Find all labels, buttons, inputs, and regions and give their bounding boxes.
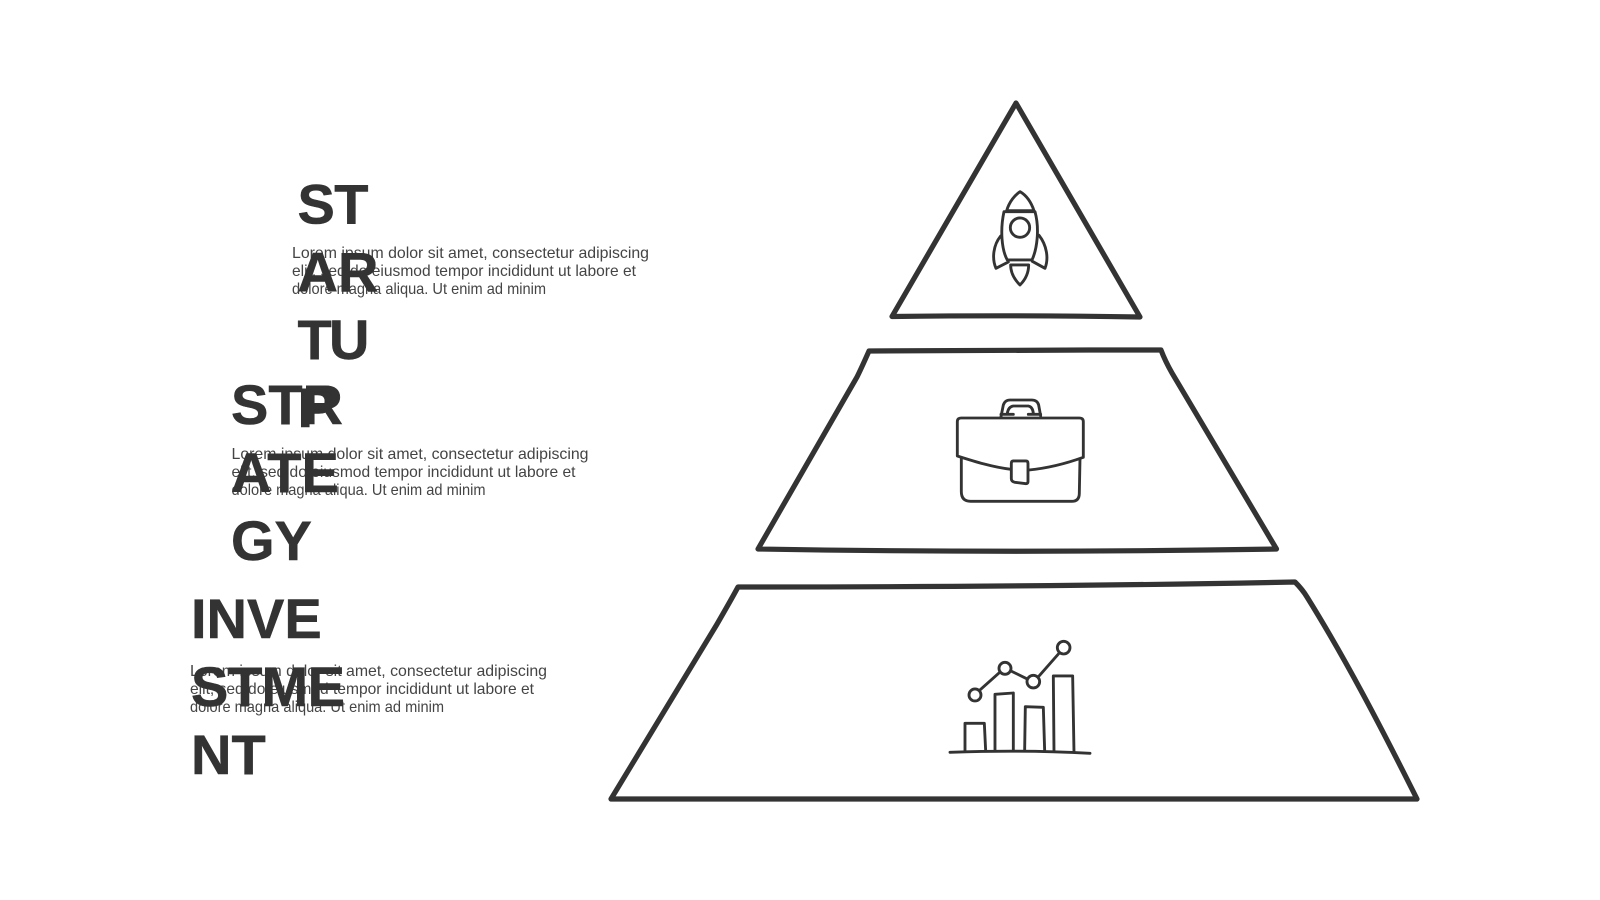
pyramid tier: top triangle bbox=[892, 103, 1140, 317]
text block: investment description: Lorem ipsum dolor sit amet, consectetur adipiscing bbox=[190, 663, 547, 680]
text block: investment description bbox=[190, 663, 547, 716]
text block: strategy description bbox=[232, 446, 588, 499]
icon: rocket bbox=[994, 192, 1047, 285]
pyramid tier: middle trapezoid bbox=[758, 350, 1276, 551]
heading: strategy: STR bbox=[231, 373, 343, 436]
heading: investment: NT bbox=[191, 723, 266, 786]
text block: startup description bbox=[292, 245, 649, 298]
heading: investment bbox=[191, 587, 345, 786]
heading: startup: TU bbox=[298, 308, 370, 371]
heading: startup: ST bbox=[298, 172, 368, 236]
text block: strategy description: Lorem ipsum dolor sit amet, consectetur adipiscing bbox=[232, 446, 588, 463]
icon: bar chart with trend line bbox=[950, 641, 1090, 753]
heading: investment: STME bbox=[191, 655, 345, 718]
text block: investment description: dolore magna aliqua. Ut enim ad minim bbox=[190, 699, 444, 716]
text block: startup description: dolore magna aliqua. Ut enim ad minim bbox=[292, 281, 546, 298]
heading: startup: P bbox=[298, 376, 335, 439]
heading: strategy: ATE bbox=[231, 441, 339, 504]
heading: strategy bbox=[231, 373, 343, 572]
icon: briefcase bbox=[957, 400, 1083, 501]
heading: investment: INVE bbox=[191, 587, 322, 650]
pyramid tier: bottom trapezoid bbox=[611, 582, 1417, 799]
heading: startup bbox=[298, 172, 378, 439]
text block: startup description: Lorem ipsum dolor sit amet, consectetur adipiscing bbox=[292, 245, 649, 262]
text block: startup description: elit, sed do eiusmod tempor incididunt ut labore et bbox=[292, 263, 637, 280]
heading: startup: AR bbox=[298, 240, 378, 304]
text block: investment description: elit, sed do eiusmod tempor incididunt ut labore et bbox=[190, 681, 535, 698]
heading: strategy: GY bbox=[231, 509, 312, 572]
text block: strategy description: dolore magna aliqua. Ut enim ad minim bbox=[232, 482, 486, 499]
text block: strategy description: elit, sed do eiusmod tempor incididunt ut labore et bbox=[232, 464, 576, 481]
